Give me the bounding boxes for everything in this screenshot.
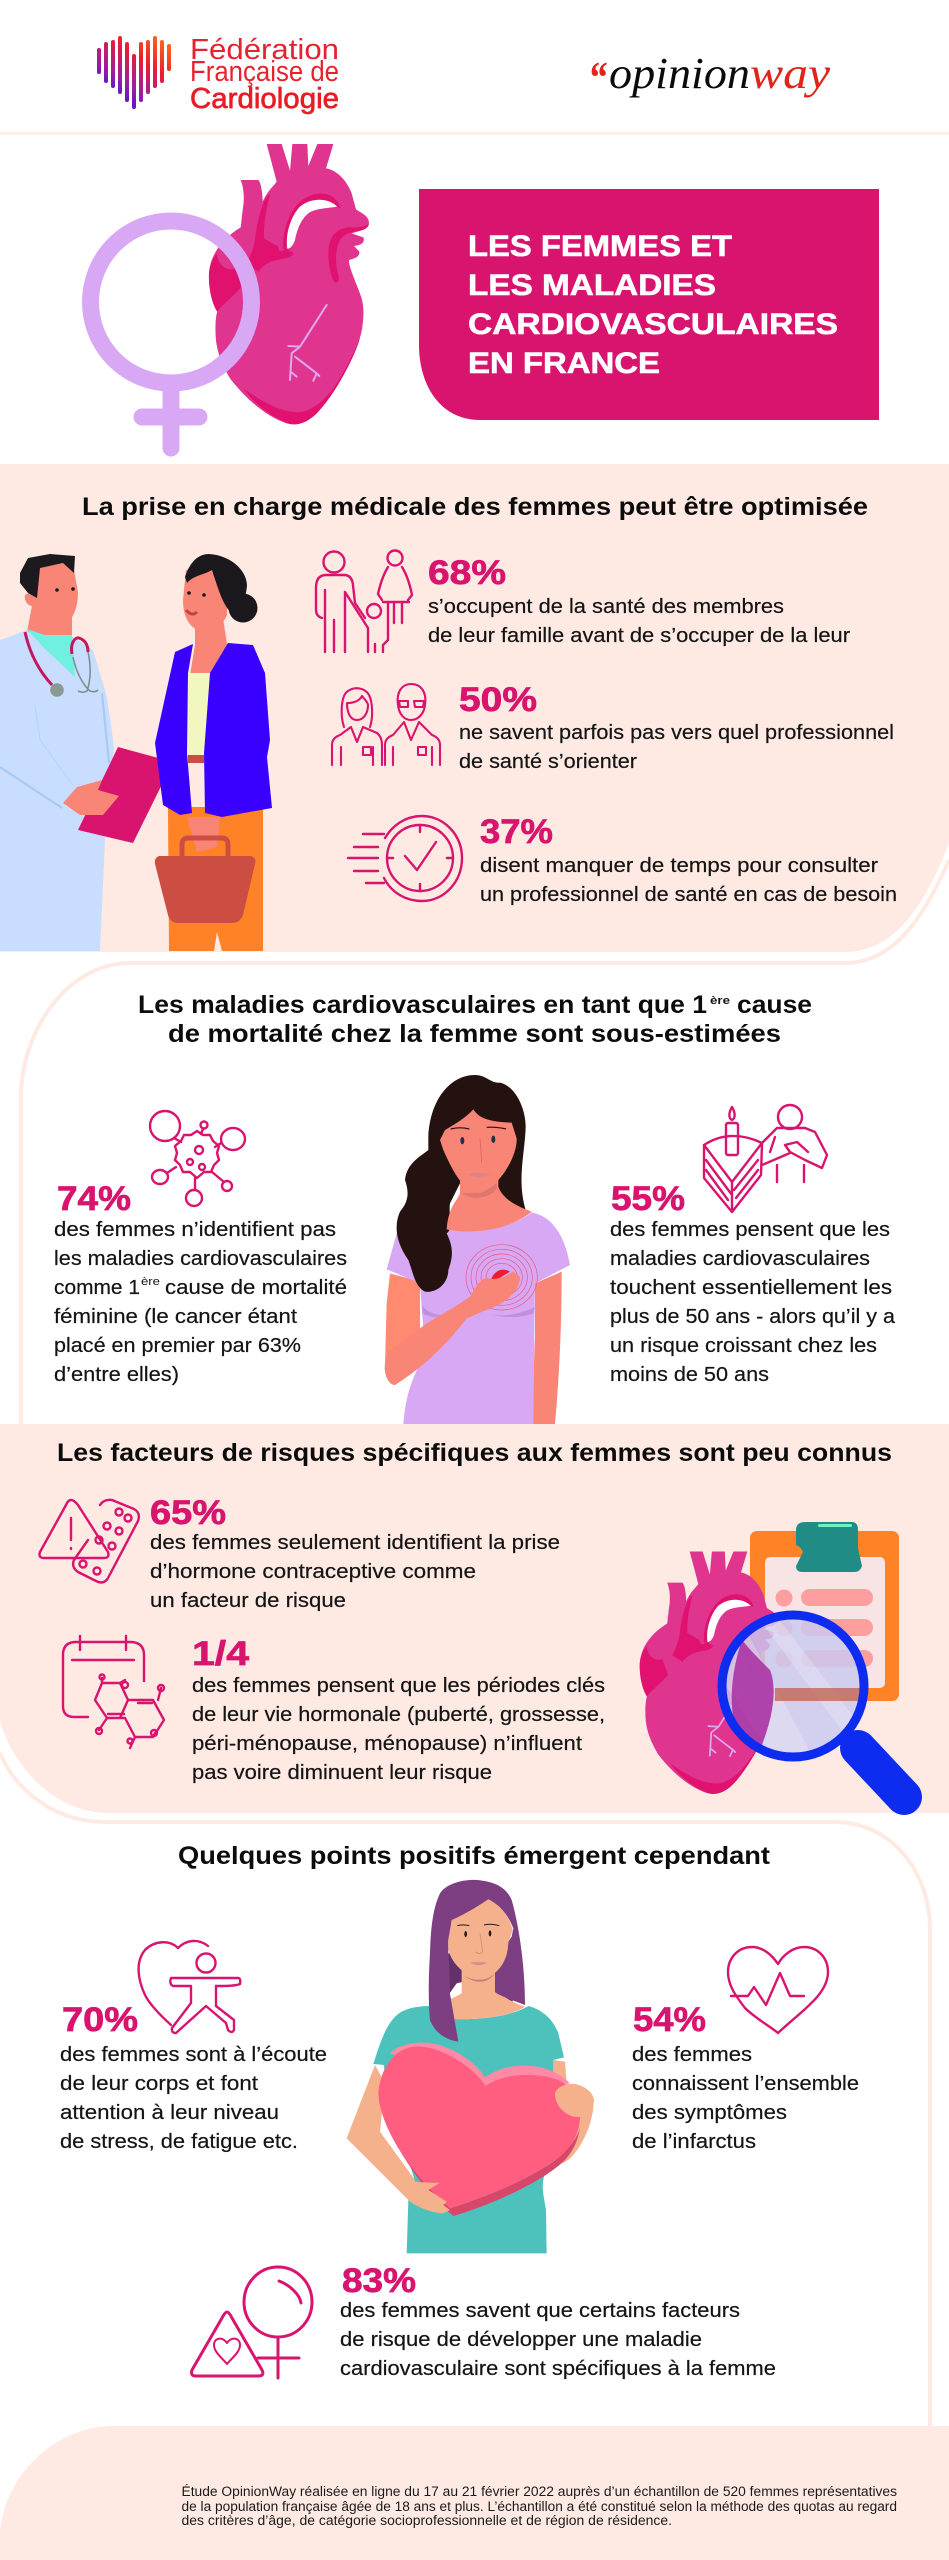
stat: 54%: des femmes [632,2043,752,2066]
footnote: study method [182,2484,897,2528]
stat: 54%: connaissent l’ensemble [632,2072,859,2095]
stat: 1/4: péri-ménopause, ménopause) n’influent [192,1732,582,1755]
logo: Fédération Française de Cardiologie: Française de [190,56,339,88]
heading: section 2: ère [710,995,730,1007]
stat: 54%: de l’infarctus [632,2130,756,2153]
stat: 37% [480,813,897,906]
stat: 65%: 65% [150,1494,226,1532]
stat: 83% [340,2262,776,2380]
stat: 70%: attention à leur niveau [60,2101,279,2124]
stat: 68%: s’occupent de la santé des membres [428,595,784,618]
stat: 50%: 50% [459,681,537,719]
stat: 70%: des femmes sont à l’écoute [60,2043,327,2066]
stat: 55%: moins de 50 ans [610,1363,769,1386]
stat: 54%: 54% [633,2001,706,2039]
logo: opinionway: “ [588,53,607,102]
icon: clock [348,816,462,901]
stat: 1/4: pas voire diminuent leur risque [192,1761,492,1784]
illustration: heart under magnifier [640,1551,778,1794]
illustration: clipboard [750,1522,899,1701]
stat: 37%: 37% [480,813,553,851]
heading: section 4: Quelques points positifs émergent cependant [178,1842,771,1870]
stat: 50% [459,681,894,773]
heading: section 2 [138,991,812,1048]
stat: 50%: de santé s’orienter [459,750,637,773]
logo: Fédération Française de Cardiologie [99,34,339,115]
stat: 74%: des femmes n’identifient pas [54,1218,336,1241]
stat: 55%: maladies cardiovasculaires [610,1247,870,1270]
icon: magnifying glass [722,1615,904,1797]
stat: 55%: touchent essentiellement les [610,1276,892,1299]
footnote: study method: Étude OpinionWay réalisée en ligne du 17 au 21 février 2022 auprès d’un échantillon de 520 femmes représentatives [182,2484,897,2499]
stat: 70%: 70% [62,2001,138,2039]
icon: calendar and hormone molecule [63,1636,164,1748]
icon: yoga heart [139,1941,240,2033]
stat: 37%: disent manquer de temps pour consulter [480,854,878,877]
stat: 1/4 [192,1635,605,1784]
title banner: CARDIOVASCULAIRES [468,308,838,341]
stat: 1/4: 1/4 [192,1635,249,1673]
stat: 83%: 83% [342,2262,416,2300]
stat: 74% [54,1180,347,1386]
icon: heart with ECG [728,1947,828,2033]
stat: 1/4: des femmes pensent que les périodes clés [192,1674,605,1697]
stat: 70%: de leur corps et font [60,2072,258,2095]
logo: opinionway [588,49,831,102]
illustration: woman with bag [155,554,272,951]
stat: 68%: de leur famille avant de s’occuper de la leur [428,624,850,647]
stat: 74%: féminine (le cancer étant [54,1305,297,1328]
stat: 83%: de risque de développer une maladie [340,2328,702,2351]
heading: section 1: La prise en charge médicale des femmes peut être optimisée [82,493,868,521]
logo: Fédération Française de Cardiologie: Cardiologie [190,83,339,115]
stat: 83%: des femmes savent que certains facteurs [340,2299,740,2322]
stat: 37%: un professionnel de santé en cas de besoin [480,883,897,906]
stat: 68%: 68% [428,554,506,592]
logo: opinionway: way [750,49,831,98]
illustration: woman holding chest [385,1075,570,1424]
heading: section 2: de mortalité chez la femme sont sous-estimées [168,1020,781,1048]
stat: 74%: d’entre elles) [54,1363,179,1386]
stat: 55% [610,1180,896,1386]
logo: Fédération Française de Cardiologie: Fédération [190,34,339,66]
heading: section 2: cause [737,991,812,1019]
stat: 70%: de stress, de fatigue etc. [60,2130,298,2153]
stat: 65%: un facteur de risque [150,1589,346,1612]
heading: section 3: Les facteurs de risques spécifiques aux femmes sont peu connus [57,1439,892,1467]
stat: 54% [632,2001,859,2153]
stat: 83%: cardiovasculaire sont spécifiques à la femme [340,2357,776,2380]
stat: 65%: des femmes seulement identifient la prise [150,1531,560,1554]
stat: 74%: ère [141,1276,160,1288]
title banner: LES MALADIES [468,269,716,302]
footnote: study method: des critères d’âge, de catégorie socioprofessionnelle et de région de résidence. [182,2513,672,2528]
heading: section 2: Les maladies cardiovasculaires en tant que 1 [138,991,707,1019]
stat: 70% [60,2001,327,2153]
stat: 74%: placé en premier par 63% [54,1334,301,1357]
icon: cake and chest pain [704,1105,827,1212]
stat: 74%: 74% [57,1180,131,1218]
stat: 55%: un risque croissant chez les [610,1334,877,1357]
stat: 68% [428,554,850,647]
stat: 54%: des symptômes [632,2101,787,2124]
stat: 74%: les maladies cardiovasculaires [54,1247,347,1270]
icon: family [316,550,412,652]
stat: 50%: ne savent parfois pas vers quel professionnel [459,721,894,744]
illustration: woman holding heart [347,1880,594,2253]
stat: 74%: cause de mortalité [165,1276,347,1299]
icon: warning and contraceptive pill [40,1500,139,1582]
stat: 55%: plus de 50 ans - alors qu’il y a [610,1305,896,1328]
logo: opinionway: opinion [609,49,750,98]
icon: virus [150,1111,245,1206]
stat: 55%: 55% [611,1180,685,1218]
icon: female symbol with warning triangle [192,2267,312,2378]
stat: 55%: des femmes pensent que les [610,1218,890,1241]
stat: 65% [150,1494,560,1612]
stat: 65%: d’hormone contraceptive comme [150,1560,476,1583]
illustration: doctor [0,554,173,951]
icon: female symbol [90,221,252,448]
illustration: heart [209,144,369,424]
stat: 74%: comme 1 [54,1276,140,1299]
icon: health professionals [332,684,440,765]
stat: 1/4: de leur vie hormonale (puberté, grossesse, [192,1703,605,1726]
title banner: EN FRANCE [468,347,660,380]
title banner: LES FEMMES ET [468,230,732,263]
title banner [419,189,879,420]
footnote: study method: de la population française âgée de 18 ans et plus. L’échantillon a été constitué selon la méthode des quotas au regard [182,2499,897,2514]
